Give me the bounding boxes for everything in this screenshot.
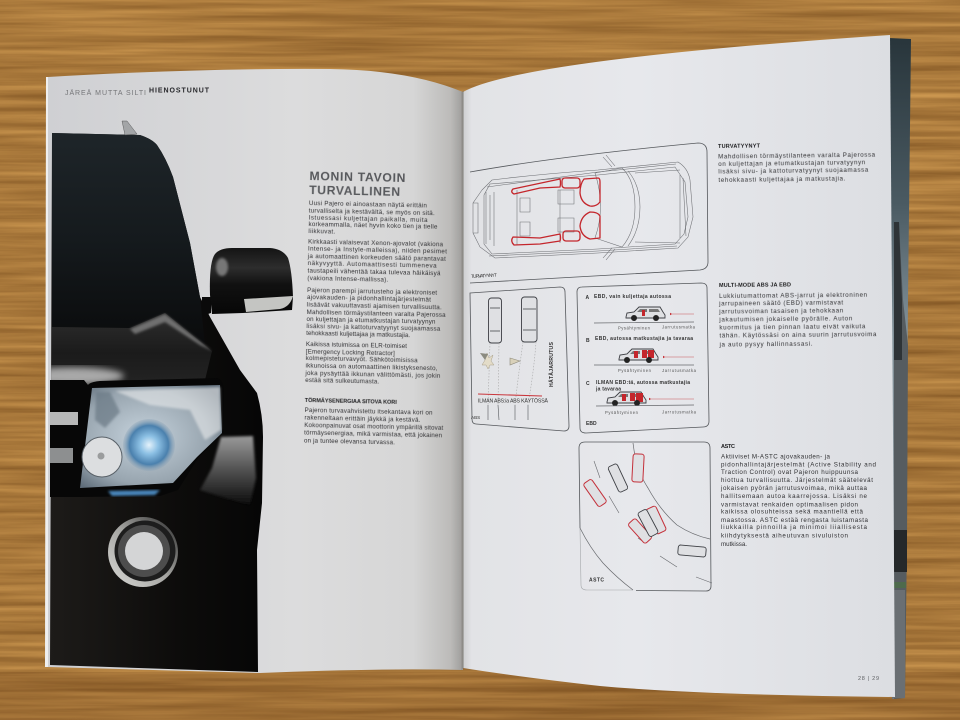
paragraph: maastossa. ASTC estää rengasta luistamasta (721, 517, 869, 524)
red airbags (512, 178, 600, 245)
black headlight surround (50, 378, 224, 497)
road centre dashes (594, 461, 712, 583)
right text: airbags (718, 142, 876, 184)
panel: ABS diagram (470, 287, 569, 431)
paragraph: brakes and airbags: on kuljettajan ja etumatkustajan turvatyynyn (306, 316, 436, 326)
paragraph: brakes and airbags (306, 287, 447, 340)
heading: MULTI-MODE ABS JA EBD (719, 282, 791, 289)
paragraph: tehokkaasti kuljettajaa ja matkustajia. (718, 175, 846, 184)
paragraph: brakes and airbags: Mahdollisen törmäystilanteen varalta Pajerossa (307, 309, 446, 319)
paragraph: Traction Control) ovat Pajeron huippuunsa (721, 469, 859, 476)
heading: Monin tavoin turvallinen: TURVALLINEN (309, 183, 400, 199)
paragraph: seat belts: ikkunoissa on automaattinen likistyksenesto, (305, 362, 438, 372)
paragraph: seat belts: kolmepisteturvavyöt. Sähkötoimisissa (306, 355, 418, 364)
car top view outline (473, 155, 693, 260)
paragraph: liukkailla pinnoilla ja minimoi liiallisesta (721, 524, 868, 531)
heading: ASTC (721, 444, 735, 450)
ABS comparison label: ILMAN ABS:ia ABS KÄYTÖSSÄ (478, 398, 549, 404)
paragraph: Lukkiutumattomat ABS-jarrut ja elektroninen (719, 292, 868, 300)
paragraph: body structure: rakenneltaan erittäin jäykkä ja kestävä. (304, 414, 421, 424)
paragraph: intro: Uusi Pajero ei ainoastaan näytä erittäin (309, 200, 428, 209)
fog lamp (108, 517, 178, 587)
paragraph: seat belts: estää sitä sulkeutumasta. (305, 377, 380, 386)
paragraph: jarrupaineen säätö (EBD) varmistavat (718, 299, 843, 308)
car body silhouette (50, 133, 263, 672)
paragraph: jakautumisen jokaiselle pyörälle. Auton (718, 315, 853, 324)
car B (619, 349, 658, 363)
row C: ILMAN EBD:tä, autossa matkustajia (596, 380, 690, 386)
paragraph: seat belts (304, 341, 442, 387)
paragraph: mutkissa. (721, 541, 747, 548)
row C: ja tavaraa (595, 386, 621, 392)
running header (65, 88, 210, 97)
panel: airbag top view diagram (470, 143, 708, 283)
car with ABS (522, 297, 537, 342)
row A: Jarrutusmatka (662, 324, 696, 330)
paragraph: body structure: törmäysenergiaa, mikä varmistaa, että jokainen (304, 429, 443, 439)
paragraph: lights: (vakiona Intense-mallissa). (307, 275, 389, 284)
emergency braking label: HÄTÄJARRUTUS (548, 341, 555, 387)
panel label: ASTC (589, 578, 604, 584)
paragraph: lights: Intense- ja Instyle-malleissa), niiden pesimet (308, 245, 447, 255)
car C (607, 392, 646, 406)
paragraph: body structure: Pajeron turvavahvistettu itsekantava kori on (305, 407, 433, 417)
paragraph: lights: näkyvyyttä. Automaattisesti tummeneva (308, 260, 437, 270)
car without ABS (488, 298, 502, 343)
running header: HIENOSTUNUT (149, 88, 210, 94)
heading: Monin tavoin turvallinen (309, 169, 406, 199)
paragraph: brakes and airbags: lisäksi sivu- ja kattoturvatyynyt suojaamassa (306, 323, 441, 333)
paragraph: lights (306, 238, 447, 285)
row B (586, 336, 697, 373)
paragraph: Mahdollisen törmäystilanteen varalta Pajerossa (718, 152, 876, 160)
paragraph: on kuljettajan ja etumatkustajan turvatyynyn (718, 159, 866, 168)
paragraph: brakes and airbags: Pajeron parempi jarrutusteho ja elektroniset (307, 287, 437, 297)
tyre marks (488, 405, 528, 420)
paragraph: brakes and airbags: ajovakauden- ja pidonhallintajärjestelmät (307, 294, 431, 304)
right text: ASTC (720, 444, 877, 548)
row B: B (586, 338, 590, 344)
road edges (580, 443, 710, 590)
panel label: TURVATYYNYT (471, 273, 497, 280)
bonnet shading (51, 313, 212, 385)
row A: A (586, 295, 590, 301)
paragraph: intro: korkeammalla, näet hyvin koko tien ja tielle (308, 221, 438, 231)
paragraph: jokaisen pyörän jarrutusvoimaa, mikä auttaa (720, 485, 868, 492)
aerial (122, 121, 137, 135)
car A (626, 307, 665, 321)
paragraph: lights: ja automaattinen korkeuden säätö parantavat (307, 253, 446, 263)
heading: Monin tavoin turvallinen: MONIN TAVOIN (309, 169, 406, 185)
paragraph: lights: taustapeili vähentää takaa tulevaa häikäisyä (307, 267, 441, 277)
dashed braking paths (488, 342, 536, 405)
row B: EBD, autossa matkustajia ja tavaraa (595, 336, 693, 342)
row A: EBD, vain kuljettaja autossa (594, 294, 671, 300)
paragraph: varmistavat renkaiden optimaalisen pidon (721, 502, 859, 508)
paragraph: lisäksi sivu- ja kattoturvatyynyt suojaamassa (718, 167, 869, 175)
paragraph (718, 152, 876, 184)
paragraph: hiottua turvallisuutta. Järjestelmät säätelevät (721, 477, 873, 484)
paragraph: kiihdytyksestä aiheutuvan sivuluiston (721, 532, 849, 540)
left page (45, 69, 463, 673)
panel: ASTC diagram (579, 442, 712, 591)
paragraph (718, 292, 877, 349)
paragraph: intro: Istuessasi kuljettajan paikalla, muita (309, 214, 428, 224)
panel frame (579, 442, 711, 591)
paragraph (720, 454, 877, 548)
paragraph: tähän. Käytössäsi on aina suurin jarrutusvoima (719, 331, 877, 339)
paragraph: body structure: Kokoonpainuvat osat moottorin ympärillä sitovat (304, 422, 444, 432)
row C: C (586, 381, 590, 387)
row B: Pysähtyminen (618, 368, 652, 373)
row C (586, 380, 697, 415)
running header: JÄREÄ MUTTA SILTI (65, 89, 146, 97)
panel frame (470, 143, 708, 283)
paragraph: Aktiiviset M-ASTC ajovakauden- ja (721, 454, 831, 460)
paragraph: seat belts: Kaikissa istuimissa on ELR-toimiset (306, 341, 407, 350)
wing mirror (202, 248, 293, 316)
right page (463, 35, 895, 697)
row C: Pysähtyminen (605, 410, 639, 415)
headlight lens (80, 385, 222, 496)
spine shadow (462, 90, 464, 670)
subheading: body structure: TÖRMÄYSENERGIAA SITOVA KORI (305, 397, 397, 406)
page numbers: 28 | 29 (858, 676, 879, 682)
fender highlight (200, 436, 256, 505)
paragraph: intro: liikkuvat. (308, 228, 336, 236)
grille slats (50, 412, 78, 463)
row C: Jarrutusmatka (662, 410, 697, 414)
panel frame (470, 287, 569, 431)
back cover photo strip with castle tower (889, 38, 911, 699)
paragraph: lights: Kirkkaasti valaisevat Xenon-ajovalot (vakiona (308, 238, 444, 248)
paragraph: intro: turvalliselta ja kestävältä, se myös on sitä. (309, 207, 435, 217)
photo: black car front (50, 120, 293, 672)
heading: TURVATYYNYT (718, 143, 761, 150)
paragraph: jarrutusvoiman tasaisen ja tehokkaan (718, 307, 844, 316)
panel frame (577, 283, 709, 433)
paragraph: seat belts: joka pysäyttää ikkunan välittömästi, jos jokin (304, 370, 441, 380)
dark car paths (608, 463, 706, 557)
paragraph: pidonhallintajärjestelmät (Active Stability and (721, 462, 877, 468)
row A (586, 294, 696, 330)
paragraph: brakes and airbags: lisäävät vakuuttavasti ajamisen turvallisuutta. (307, 301, 442, 311)
icon: obstacle cone (510, 358, 520, 365)
row A: Pysähtyminen (618, 326, 651, 330)
panel: EBD diagram (577, 283, 709, 433)
paragraph: brakes and airbags: tehokkaasti kuljettajaa ja matkustajia. (306, 330, 411, 339)
red stop line (478, 394, 542, 396)
paragraph: body structure: on ja tuntee olevansa turvassa. (304, 437, 395, 446)
row B: Jarrutusmatka (662, 368, 697, 373)
paragraph: intro (308, 200, 439, 238)
paragraph: kaikissa olosuhteissa sekä maantiellä että (721, 508, 864, 516)
panel label: ABS (471, 415, 480, 420)
paragraph: kuormitus ja tien pinnan laatu eivät vaikuta (719, 323, 866, 331)
paragraph: seat belts: [Emergency Locking Retractor] (306, 348, 395, 357)
panel label: EBD (586, 421, 597, 427)
right text: ABS and EBD (718, 282, 877, 349)
paragraph: ja auto pysyy hallinnassasi. (718, 341, 813, 349)
paragraph: hallitsemaan autoa kaarrejossa. Lisäksi ne (721, 493, 868, 500)
red car paths (583, 454, 667, 544)
windshield (52, 133, 205, 345)
icon: collision star (480, 353, 494, 369)
left text column (303, 169, 449, 447)
paragraph: body structure (304, 407, 444, 447)
